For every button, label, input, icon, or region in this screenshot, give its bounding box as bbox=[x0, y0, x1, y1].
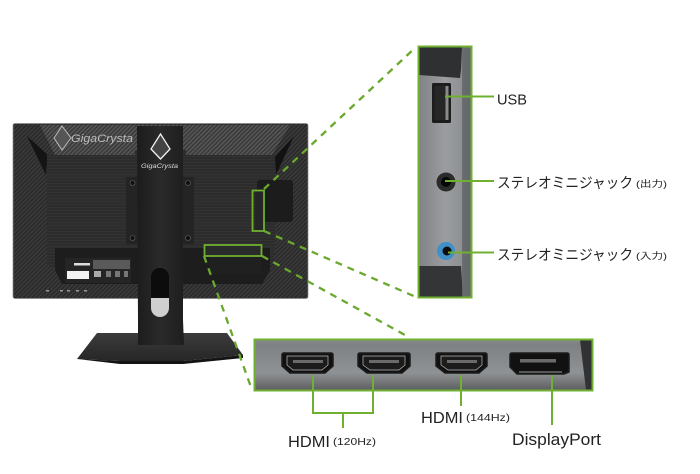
panel: side port close-up bbox=[418, 46, 472, 298]
panel: rear port close-up bbox=[254, 339, 593, 391]
callout: stereo mini jack input: (入力) bbox=[636, 250, 667, 261]
icon: HDMI port 3 bbox=[436, 353, 487, 373]
stand base bbox=[77, 333, 243, 364]
monitor housing bbox=[13, 124, 308, 298]
VESA plate bbox=[126, 177, 194, 244]
callout: HDMI 144Hz: HDMI bbox=[421, 410, 463, 427]
icon: HDMI port 2 bbox=[358, 353, 410, 373]
stand cable hole bbox=[151, 268, 169, 317]
callout: HDMI 144Hz bbox=[421, 375, 510, 427]
side port block bbox=[255, 180, 293, 230]
callout: stereo mini jack output bbox=[445, 175, 667, 192]
callout: HDMI 120Hz bbox=[288, 375, 376, 451]
stand logo: GigaCrysta bbox=[141, 163, 178, 170]
callout: stereo mini jack input bbox=[448, 247, 667, 264]
callout: stereo mini jack input: ステレオミニジャック bbox=[497, 247, 633, 264]
callout: HDMI 144Hz: (144Hz) bbox=[466, 412, 510, 424]
housing logo bbox=[54, 126, 133, 150]
callout: DisplayPort bbox=[512, 375, 601, 449]
bottom ports bbox=[205, 246, 262, 274]
callout: stereo mini jack output: (出力) bbox=[636, 178, 667, 189]
rear label bbox=[65, 258, 131, 283]
icon: audio out jack bbox=[436, 172, 456, 192]
stand column bbox=[137, 126, 184, 345]
highlight: rear ports bbox=[204, 245, 262, 256]
callout: USB: USB bbox=[497, 92, 527, 108]
icon: HDMI port 1 bbox=[282, 353, 333, 373]
highlight: side ports bbox=[252, 190, 264, 231]
callout: HDMI 120Hz: HDMI bbox=[288, 434, 330, 451]
callout: HDMI 120Hz: (120Hz) bbox=[333, 436, 376, 448]
buttons bbox=[46, 290, 87, 292]
callout: USB bbox=[445, 92, 527, 108]
icon: audio in jack bbox=[437, 242, 455, 260]
callout: DisplayPort: DisplayPort bbox=[512, 431, 601, 449]
callout: stereo mini jack output: ステレオミニジャック bbox=[497, 175, 633, 192]
zoom indicators: dashed connector lines bbox=[204, 47, 416, 390]
icon: USB port bbox=[432, 83, 451, 123]
stand logo bbox=[141, 134, 178, 170]
housing logo: GigaCrysta bbox=[71, 133, 133, 145]
icon: DisplayPort port bbox=[510, 353, 569, 374]
monitor rear bbox=[13, 124, 308, 364]
